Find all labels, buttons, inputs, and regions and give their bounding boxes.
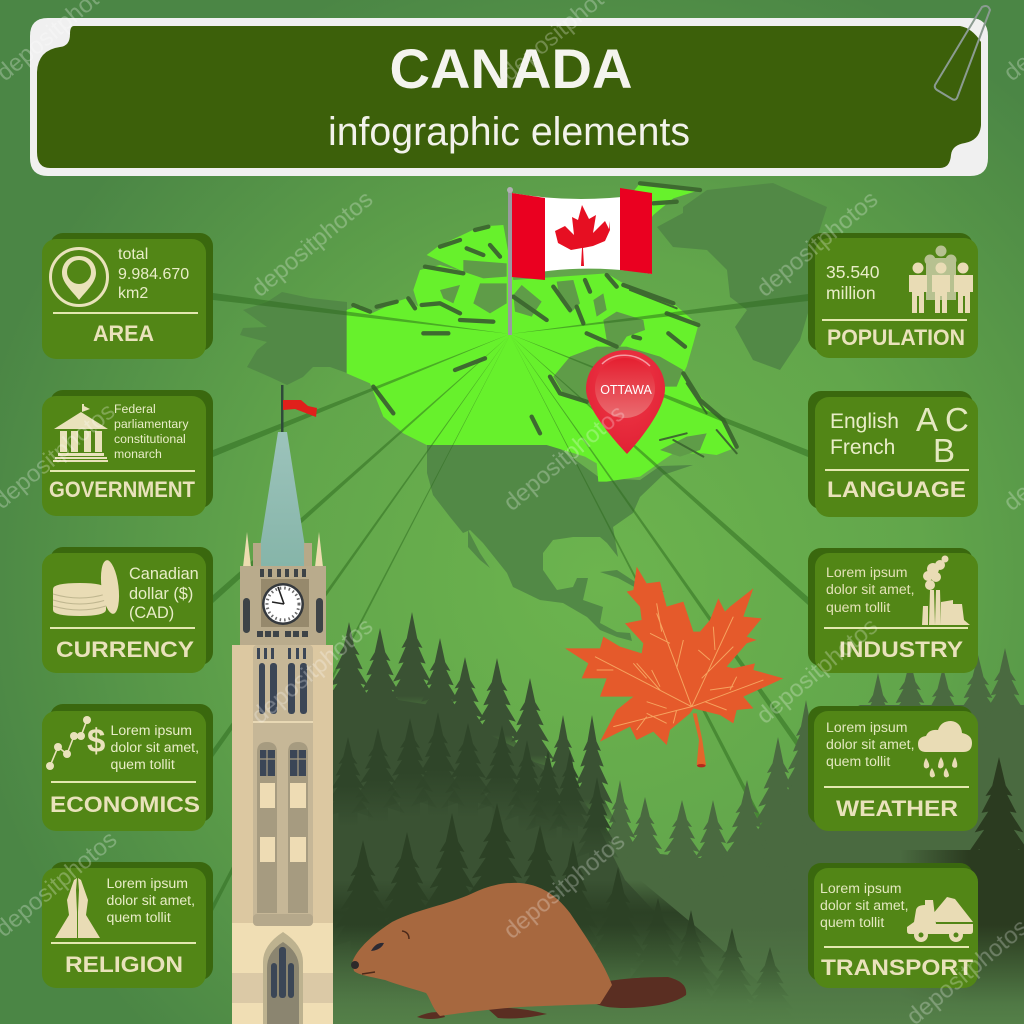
transport text: quem tollit xyxy=(820,914,884,930)
transport text: dolor sit amet, xyxy=(820,897,909,913)
title: paper clip xyxy=(935,6,990,100)
population label: POPULATION xyxy=(827,325,965,350)
icon: letters: B xyxy=(933,432,955,469)
icon: parliament building xyxy=(53,404,108,462)
language text: English xyxy=(830,410,899,433)
economics text xyxy=(110,722,199,772)
forest: middle layer xyxy=(322,712,619,867)
population text: 35.540 xyxy=(826,262,880,282)
watermarks: depositphotos xyxy=(247,613,378,730)
canadian flag xyxy=(512,188,652,280)
tower: battlement ticks xyxy=(243,569,323,637)
icon: location pin xyxy=(50,248,108,306)
religion text: quem tollit xyxy=(106,909,171,925)
language label: LANGUAGE xyxy=(827,477,966,502)
forest: back layer xyxy=(333,648,1024,1024)
icon: rain cloud xyxy=(918,721,972,778)
panel: government xyxy=(42,390,213,516)
icon: dump truck xyxy=(907,897,973,942)
industry text: Lorem ipsum xyxy=(826,564,907,580)
industry text xyxy=(826,564,915,615)
icon: rising chart: $ xyxy=(87,722,105,759)
watermarks: depositphotos xyxy=(499,400,630,517)
tower: middle windows xyxy=(257,742,308,913)
religion text: dolor sit amet, xyxy=(106,892,195,908)
weather text: dolor sit amet, xyxy=(826,736,915,752)
area label: AREA xyxy=(93,321,154,346)
economics text: quem tollit xyxy=(110,756,175,772)
beaver: tail xyxy=(588,977,686,1008)
language text xyxy=(830,410,899,459)
icon: people xyxy=(909,246,973,313)
beaver: body xyxy=(352,883,612,1016)
flag pole xyxy=(507,187,513,335)
icon: coins xyxy=(53,559,122,616)
icon: letters: A xyxy=(916,401,938,438)
currency label: CURRENCY xyxy=(56,637,194,662)
beaver: face xyxy=(351,931,409,974)
tower: shaft xyxy=(232,645,333,1024)
icon: letters: C xyxy=(945,401,969,438)
maple leaf xyxy=(565,567,783,767)
panel: weather xyxy=(808,706,978,831)
government text: parliamentary xyxy=(114,417,189,431)
icon: praying hands xyxy=(55,878,100,938)
tower: clock section xyxy=(240,566,326,646)
transport label: TRANSPORT xyxy=(821,955,974,980)
population text: million xyxy=(826,283,876,303)
icon: rising chart xyxy=(46,716,105,770)
peace tower xyxy=(232,385,333,1024)
currency text: dollar ($) xyxy=(129,585,193,603)
religion label: RELIGION xyxy=(65,952,183,977)
government text: constitutional xyxy=(114,432,186,446)
area text: 9.984.670 xyxy=(118,266,189,283)
weather text: quem tollit xyxy=(826,753,890,769)
area text xyxy=(118,246,189,302)
watermarks: depositphotos xyxy=(499,828,630,945)
currency text xyxy=(129,565,199,622)
forest: front layer xyxy=(329,757,1024,1024)
panel: population xyxy=(808,233,978,358)
tower: upper windows xyxy=(257,648,307,714)
forest: ground fade xyxy=(333,925,1024,1024)
currency text: (CAD) xyxy=(129,604,174,622)
watermarks: depositphotos xyxy=(752,186,883,303)
religion text xyxy=(106,875,195,925)
religion text: Lorem ipsum xyxy=(106,875,188,891)
icon: maple leaf on flag xyxy=(555,205,610,266)
map pin: ottawa xyxy=(586,350,665,454)
map: north america silhouette xyxy=(240,183,827,641)
forest: dark right tree xyxy=(963,757,1024,887)
economics text: dolor sit amet, xyxy=(110,739,199,755)
title banner xyxy=(30,6,990,176)
forest xyxy=(321,612,1024,1024)
government text: monarch xyxy=(114,447,162,461)
area text: total xyxy=(118,246,148,263)
currency text: Canadian xyxy=(129,565,199,583)
forest: upper dark layer xyxy=(321,612,760,1024)
transport text: Lorem ipsum xyxy=(820,880,901,896)
rays from map to panels xyxy=(213,293,808,917)
beaver: feet xyxy=(417,1008,547,1019)
economics text: Lorem ipsum xyxy=(110,722,192,738)
panel: currency xyxy=(42,547,213,673)
panel: transport xyxy=(808,863,978,988)
industry text: quem tollit xyxy=(826,599,890,615)
transport text xyxy=(820,880,909,930)
government text xyxy=(114,402,189,461)
panel: area xyxy=(42,233,213,359)
area text: km2 xyxy=(118,285,148,302)
industry text: dolor sit amet, xyxy=(826,581,915,597)
icon: factory xyxy=(922,556,970,625)
title: heading: CANADA xyxy=(390,37,632,100)
beaver xyxy=(351,883,686,1019)
weather label: WEATHER xyxy=(836,796,958,821)
tower: turrets xyxy=(240,532,326,591)
government text: Federal xyxy=(114,402,156,416)
title: subtitle: infographic elements xyxy=(328,110,690,154)
language text: French xyxy=(830,436,895,459)
weather text xyxy=(826,719,915,769)
tower: flag xyxy=(281,385,317,433)
map: canada xyxy=(347,183,738,482)
panel: religion xyxy=(42,862,213,988)
panel: economics xyxy=(42,704,213,831)
panel: language xyxy=(808,391,978,517)
government label: GOVERNMENT xyxy=(49,477,196,502)
panel: industry xyxy=(808,548,978,673)
weather text: Lorem ipsum xyxy=(826,719,907,735)
tower: spire xyxy=(257,432,308,566)
industry label: INDUSTRY xyxy=(839,637,963,662)
pin label: OTTAWA xyxy=(600,383,652,397)
economics label: ECONOMICS xyxy=(50,792,200,817)
watermarks: depositphotos xyxy=(752,613,883,730)
watermarks: depositphotos xyxy=(247,186,378,303)
icon: letters xyxy=(916,401,969,469)
tower: door xyxy=(263,932,303,1024)
icon: clock xyxy=(262,583,304,625)
population text xyxy=(826,262,880,303)
